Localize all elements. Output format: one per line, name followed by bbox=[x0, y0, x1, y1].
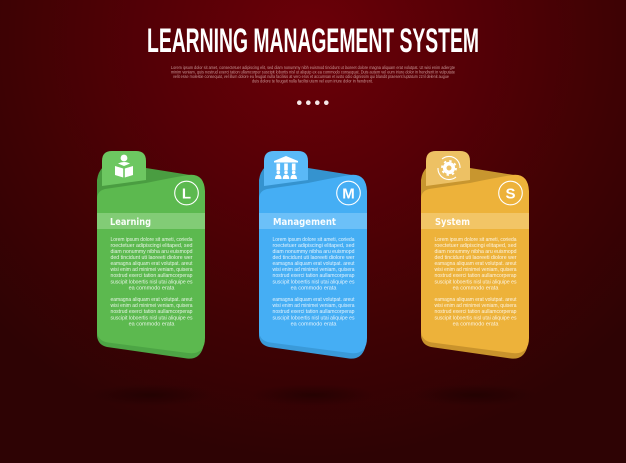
icon: reader with book bbox=[115, 155, 133, 178]
body text: eamagna aliquam erat volutpat. areut bbox=[272, 297, 355, 303]
body text: wisi enim ad minimei veniam, quisera bbox=[272, 267, 355, 273]
card bottom rim bbox=[97, 320, 205, 359]
body text: Lorem ipsum dolore sit ameti, corieda bbox=[110, 237, 193, 243]
body text: suscipit loboertis nisl utai aliquipe es bbox=[272, 280, 355, 286]
card back layer bbox=[97, 167, 200, 200]
body text: wisi enim ad minimei veniam, quisera bbox=[110, 267, 193, 273]
body text: eamagna aliquam erat volutpat. areut bbox=[110, 261, 193, 267]
floor shadows bbox=[89, 384, 537, 406]
body text: suscipit loboertis nisl utai aliquipe es bbox=[110, 316, 193, 322]
body text: eamagna aliquam erat volutpat. areut bbox=[272, 261, 355, 267]
body text: diam nonummy nibha aru euismopd bbox=[272, 249, 354, 255]
letter badge bbox=[175, 181, 198, 205]
body text: ded tincidunt uti laoreeti diolore wer bbox=[272, 255, 355, 261]
tab bbox=[264, 151, 308, 186]
letter badge: L bbox=[182, 185, 191, 202]
title band bbox=[421, 213, 529, 229]
body text: nostrud exerci tation aullamcorperap bbox=[434, 273, 516, 279]
subtitle text block bbox=[171, 65, 455, 84]
letter badge bbox=[337, 181, 360, 205]
subtitle text block: Lorem ipsum dolor sit amet, consectetuer adipiscing elit, sed diam nonummy nibh euismod tincidunt ut laoreet dolore magna aliquam erat volutpat. Ut wisi enim adiergte bbox=[171, 65, 455, 70]
body text: roectetuer adipiscingi elitaped, sed bbox=[434, 243, 516, 249]
body text bbox=[272, 237, 355, 328]
body text: ea commodo erata bbox=[129, 286, 175, 292]
body text: wisi enim ad minimei veniam, quisera bbox=[110, 303, 193, 309]
pagination dots bbox=[297, 100, 329, 105]
body text: ea commodo erata bbox=[129, 322, 175, 328]
title band bbox=[97, 213, 205, 229]
title band bbox=[259, 213, 367, 229]
card back layer bbox=[259, 167, 362, 200]
body text: diam nonummy nibha aru euismopd bbox=[434, 249, 516, 255]
body text: nostrud exerci tation aullamcorperap bbox=[272, 309, 354, 315]
body text: Lorem ipsum dolore sit ameti, corieda bbox=[434, 237, 517, 243]
letter badge bbox=[499, 181, 522, 205]
card front bbox=[421, 175, 529, 353]
icon: institution with people bbox=[274, 156, 298, 179]
body text: wisi enim ad minimei veniam, quisera bbox=[434, 303, 517, 309]
body text: roectetuer adipiscingi elitaped, sed bbox=[272, 243, 354, 249]
card front bbox=[259, 175, 367, 353]
card bottom rim bbox=[259, 320, 367, 359]
body text: nostrud exerci tation aullamcorperap bbox=[110, 309, 192, 315]
heading: System bbox=[435, 217, 470, 228]
body text: nostrud exerci tation aullamcorperap bbox=[110, 273, 192, 279]
card bottom rim bbox=[421, 320, 529, 359]
tab bbox=[102, 151, 146, 186]
tab bbox=[426, 151, 470, 186]
body text: roectetuer adipiscingi elitaped, sed bbox=[110, 243, 192, 249]
letter badge: M bbox=[342, 185, 355, 202]
body text: diam nonummy nibha aru euismopd bbox=[110, 249, 192, 255]
body text: ded tincidunt uti laoreeti diolore wer bbox=[434, 255, 517, 261]
body text: ea commodo erata bbox=[453, 322, 499, 328]
subtitle text block: duis dolore te feugait nulla facilisi utem vel eum iriure dolor in hendrerit. bbox=[252, 79, 373, 84]
body text: eamagna aliquam erat volutpat. areut bbox=[434, 261, 517, 267]
icon: gear with refresh ring bbox=[438, 156, 460, 180]
body text: wisi enim ad minimei veniam, quisera bbox=[272, 303, 355, 309]
panel: management bbox=[259, 151, 367, 359]
body text: suscipit loboertis nisl utai aliquipe es bbox=[272, 316, 355, 322]
body text: ded tincidunt uti laoreeti diolore wer bbox=[110, 255, 193, 261]
body text bbox=[434, 237, 517, 328]
body text: ea commodo erata bbox=[291, 286, 337, 292]
subtitle text block: velit esse molestie consequat, vel illum dolore eu feugiat nulla facilisis at vero eros et accumsan et iusto odio dignissim qui blandit praesent luptatum zzril delenit augue bbox=[173, 74, 449, 79]
body text: wisi enim ad minimei veniam, quisera bbox=[434, 267, 517, 273]
body text: suscipit loboertis nisl utai aliquipe es bbox=[434, 280, 517, 286]
letter badge: S bbox=[505, 185, 516, 202]
body text: nostrud exerci tation aullamcorperap bbox=[272, 273, 354, 279]
body text: eamagna aliquam erat volutpat. areut bbox=[434, 297, 517, 303]
body text: nostrud exerci tation aullamcorperap bbox=[434, 309, 516, 315]
body text: suscipit loboertis nisl utai aliquipe es bbox=[434, 316, 517, 322]
body text: suscipit loboertis nisl utai aliquipe es bbox=[110, 280, 193, 286]
card back layer bbox=[421, 167, 524, 200]
heading: Management bbox=[273, 217, 336, 228]
body text bbox=[110, 237, 193, 328]
body text: eamagna aliquam erat volutpat. areut bbox=[110, 297, 193, 303]
subtitle text block: minim veniam, quis nostrud exerci tation ullamcorper suscipit lobortis nisl ut aliquip ex ea commodo consequat. Duis autem vel eum iriure dolor in hendrerit in vulputate bbox=[171, 70, 455, 74]
body text: ea commodo erata bbox=[291, 322, 337, 328]
panel: learning bbox=[97, 151, 205, 359]
body text: Lorem ipsum dolore sit ameti, corieda bbox=[272, 237, 355, 243]
body text: ea commodo erata bbox=[453, 286, 499, 292]
card front bbox=[97, 175, 205, 353]
heading: Learning bbox=[110, 217, 151, 228]
panel: system bbox=[421, 151, 529, 359]
